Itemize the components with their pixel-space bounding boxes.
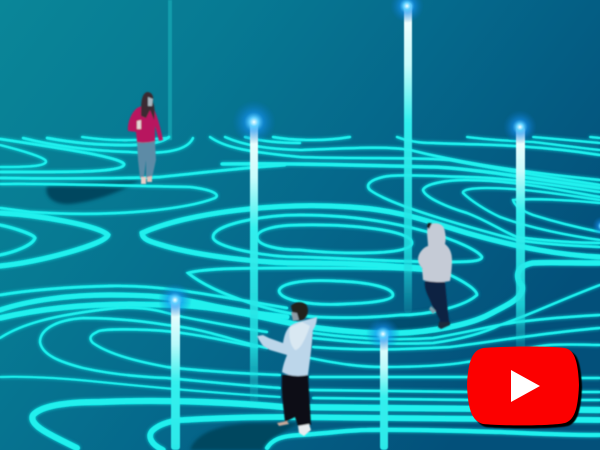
- upper right contours: [210, 137, 600, 247]
- ground shadows: [46, 180, 452, 450]
- light pole: front left: [158, 283, 192, 450]
- upper left contours: [0, 137, 285, 214]
- person: man in pale blue jacket: [257, 302, 317, 436]
- thick left loop: [0, 213, 108, 266]
- person: woman in magenta hoodie: [128, 92, 163, 184]
- central thick contour: [142, 206, 600, 268]
- icon: video play button: [467, 346, 582, 428]
- light pole: right: [503, 110, 537, 349]
- bottom thick bands: [32, 401, 600, 448]
- lower right contours: [308, 285, 600, 400]
- play button shadow: [470, 349, 582, 428]
- person: figure in white hood walking away: [418, 223, 452, 329]
- central nested ellipses: [213, 215, 482, 262]
- contour lines: [0, 137, 600, 450]
- faint distant light pole: [168, 0, 172, 140]
- light pole: back centre: [390, 0, 424, 313]
- light pole: front centre: [366, 317, 400, 450]
- edge glow right: [592, 216, 600, 236]
- play button body: [467, 346, 579, 425]
- play triangle: [511, 370, 540, 402]
- light pole: left centre: [232, 100, 276, 403]
- lower left contours: [0, 308, 280, 397]
- long wavy thick contour to the right edge: [0, 263, 600, 333]
